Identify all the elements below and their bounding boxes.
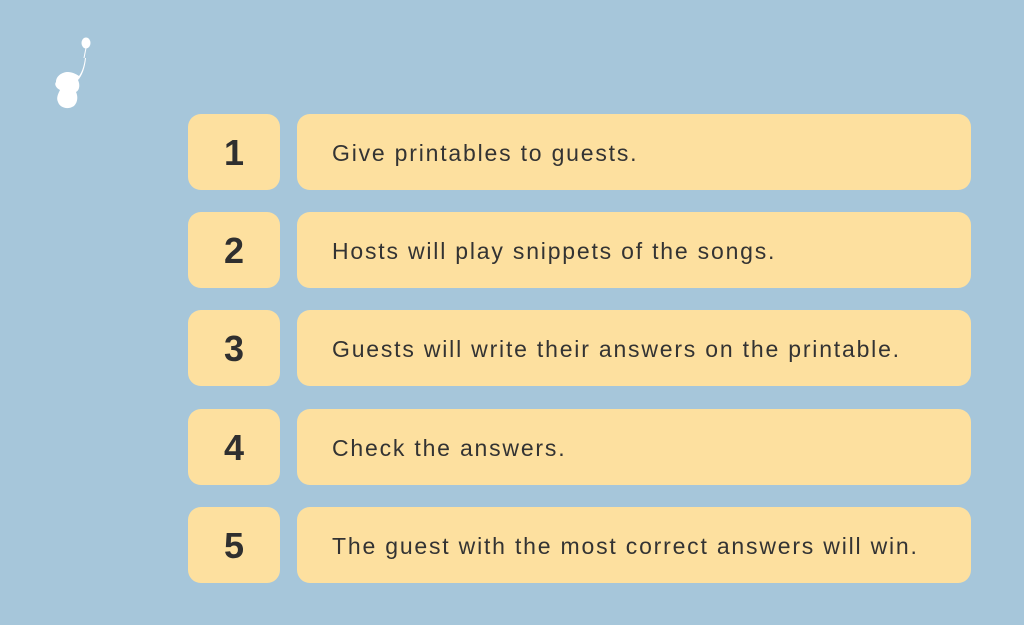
number 4: 4 (224, 427, 244, 468)
step 5 text: The guest with the most correct answers will win. (332, 532, 919, 558)
number 2: 2 (224, 230, 244, 271)
number 2 (188, 212, 280, 288)
step 3 text: Guests will write their answers on the printable. (332, 336, 901, 362)
step 1 text (297, 114, 971, 190)
number 3 (188, 310, 280, 386)
step 5 text (297, 507, 971, 583)
step 2 text: Hosts will play snippets of the songs. (332, 238, 776, 264)
number 5 (188, 507, 280, 583)
step 1 text: Give printables to guests. (332, 140, 638, 166)
number 1: 1 (224, 132, 244, 173)
step 3 text (297, 310, 971, 386)
logo: elephant with balloon (55, 38, 90, 108)
step 4 text: Check the answers. (332, 434, 566, 460)
number 5: 5 (224, 525, 244, 566)
step 2 text (297, 212, 971, 288)
number 1 (188, 114, 280, 190)
number 4 (188, 409, 280, 485)
step 4 text (297, 409, 971, 485)
number 3: 3 (224, 328, 244, 369)
